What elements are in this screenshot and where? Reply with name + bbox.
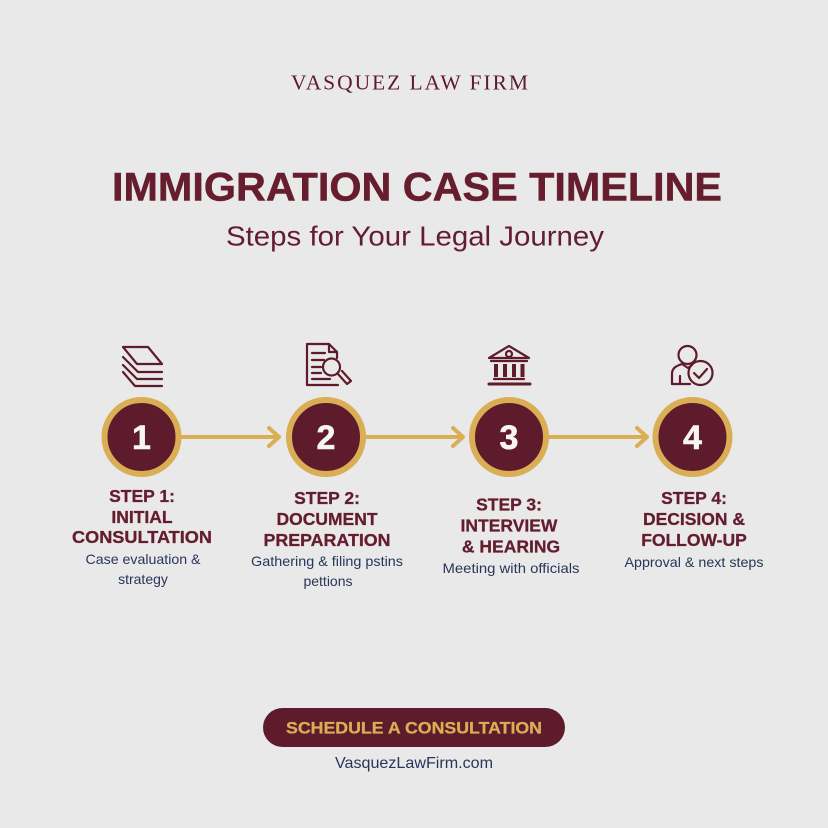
number badge 2: 2 (317, 419, 335, 457)
arrow: step 3 to step 4 (549, 428, 647, 446)
step 4 heading: FOLLOW-UP (641, 530, 747, 550)
step 1 description: strategy (118, 571, 168, 587)
icon: stacked papers (123, 347, 162, 386)
icon: courthouse (489, 346, 530, 384)
call to action button: SCHEDULE A CONSULTATION (286, 718, 542, 738)
step 1 heading: INITIAL (111, 507, 173, 527)
step 3 heading: & HEARING (462, 536, 560, 556)
step 1 heading: CONSULTATION (72, 527, 212, 547)
step 2 heading: DOCUMENT (276, 509, 378, 529)
call to action button (263, 708, 565, 747)
number badge 1 (104, 400, 178, 474)
subtitle: Steps for Your Legal Journey (226, 220, 604, 252)
number badge 3 (472, 400, 546, 474)
number badge 4: 4 (683, 419, 702, 457)
firm name: VASQUEZ LAW FIRM (291, 70, 528, 94)
panel: step 2 (251, 344, 403, 589)
step 4 heading: DECISION & (643, 509, 745, 529)
step 3 description: Meeting with officials (442, 560, 580, 576)
number badge 2 (289, 400, 363, 474)
panel: step 4 (624, 346, 764, 570)
step 2 heading: PREPARATION (264, 530, 390, 550)
step 3 heading: INTERVIEW (461, 516, 558, 536)
arrow: step 1 to step 2 (182, 428, 279, 446)
panel: step 1 (72, 347, 212, 587)
step 2 description: Gathering & filing pstins (251, 553, 403, 569)
step 4 heading: STEP 4: (661, 488, 727, 508)
number badge 1: 1 (132, 419, 151, 457)
step 2 heading: STEP 2: (294, 488, 360, 508)
step 1 heading: STEP 1: (109, 486, 175, 506)
step 4 description: Approval & next steps (624, 554, 764, 570)
arrow: step 2 to step 3 (366, 428, 463, 446)
step 1 description: Case evaluation & (86, 551, 201, 567)
website: VasquezLawFirm.com (335, 755, 493, 772)
icon: document with magnifier (307, 344, 351, 385)
icon: person with check (672, 346, 712, 385)
step 3 heading: STEP 3: (476, 494, 542, 514)
number badge 3: 3 (500, 419, 518, 457)
title: IMMIGRATION CASE TIMELINE (112, 166, 722, 210)
number badge 4 (656, 400, 730, 474)
step 2 description: pettions (303, 573, 353, 589)
panel: step 3 (442, 346, 580, 576)
